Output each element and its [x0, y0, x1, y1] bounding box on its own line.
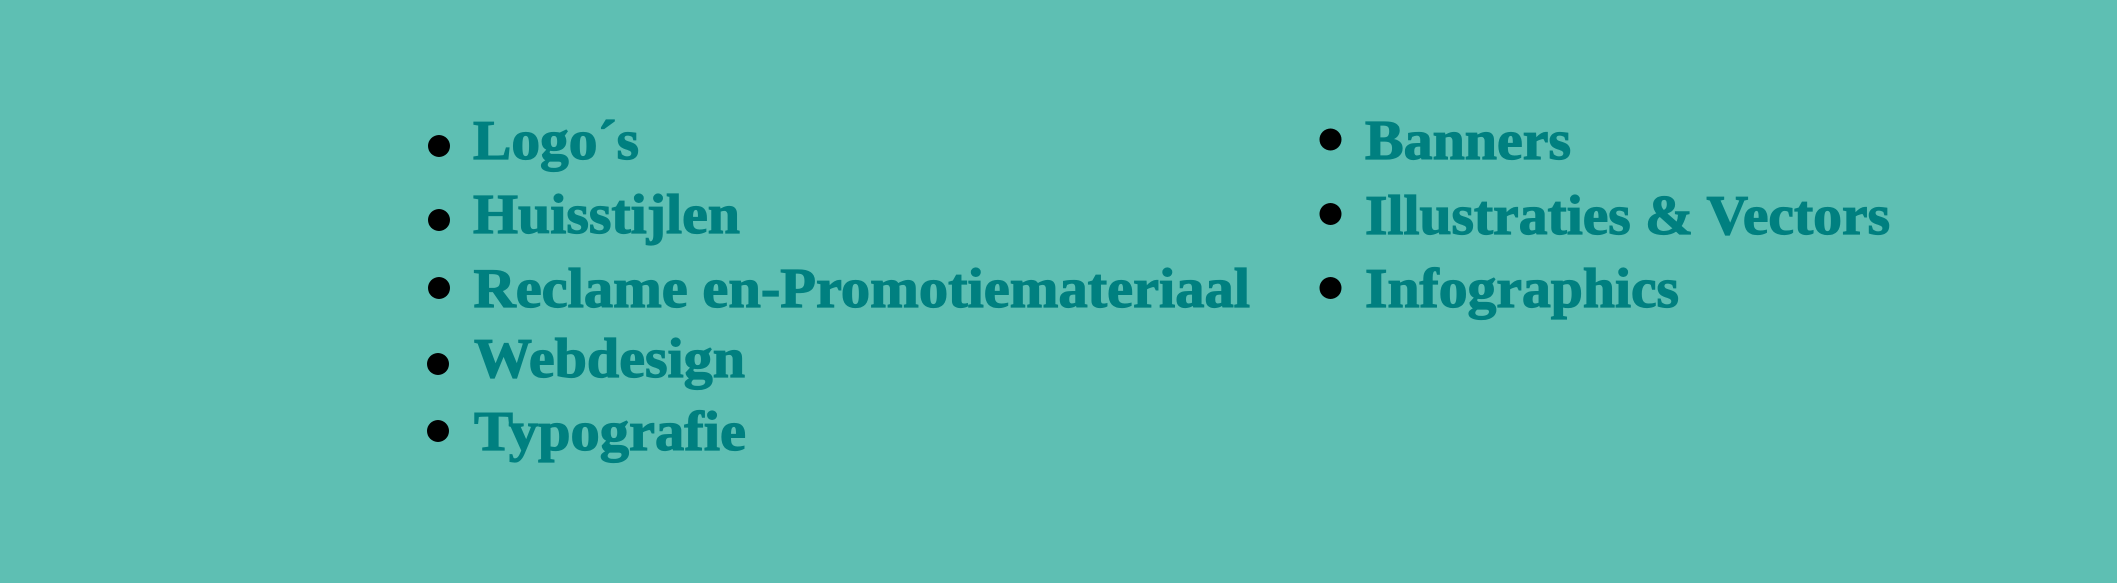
item: Webdesign: Webdesign — [474, 328, 745, 390]
item: Illustraties & Vectors: Illustraties & Vectors — [1365, 185, 1890, 247]
item: Huisstijlen: Huisstijlen — [473, 184, 740, 246]
item: Reclame en-Promotiemateriaal: Reclame en-Promotiemateriaal — [474, 258, 1250, 320]
list: right column of services — [1320, 110, 1890, 320]
item: Logo's: Logo´s — [473, 110, 639, 172]
bullet: Webdesign — [427, 353, 449, 375]
bullet: Illustraties — [1320, 203, 1342, 225]
item: Typografie: Typografie — [474, 401, 746, 463]
item: Banners: Banners — [1365, 110, 1571, 172]
item: Infographics: Infographics — [1365, 258, 1679, 320]
bullet: Logo's — [428, 135, 450, 157]
bullet: Infographics — [1320, 277, 1342, 299]
bullet: Banners — [1320, 128, 1342, 150]
bullet: Typografie — [427, 420, 449, 442]
bullet: Reclame — [428, 277, 450, 299]
bullet: Huisstijlen — [428, 209, 450, 231]
list: left column of services — [427, 110, 1250, 463]
